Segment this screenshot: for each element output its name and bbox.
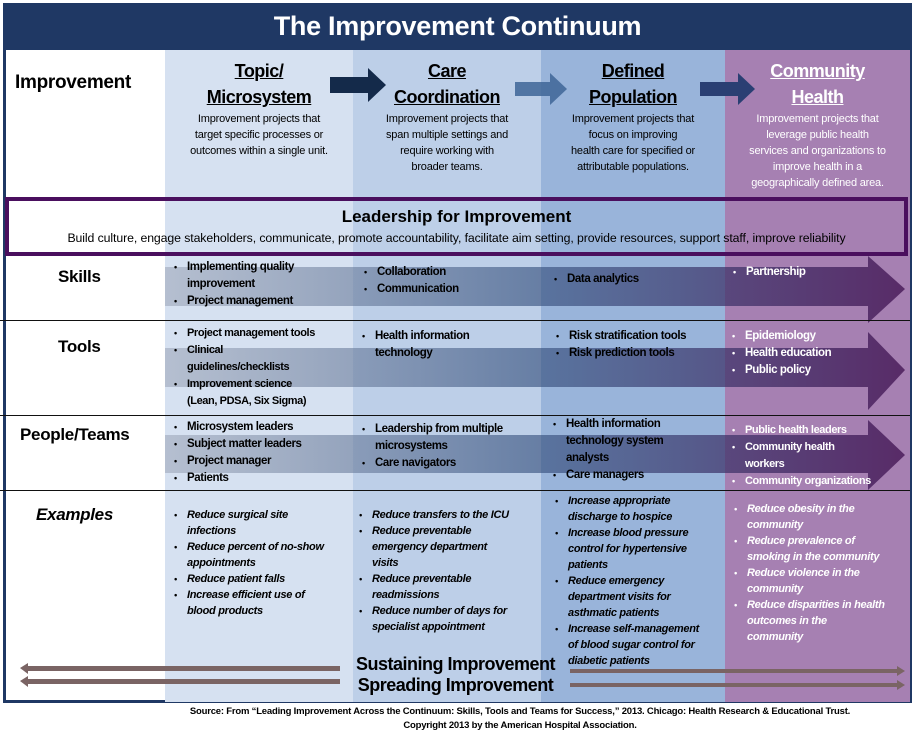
header: Community Health <box>770 61 866 107</box>
examples col3: control for hypertensive <box>568 543 687 555</box>
people col4: workers <box>745 458 784 470</box>
tools col2 <box>362 330 470 359</box>
examples col1: blood products <box>187 605 263 617</box>
people col4 <box>732 424 871 487</box>
people col3: technology system <box>566 435 663 447</box>
sustaining/spreading labels <box>356 654 556 695</box>
description: topic <box>190 113 328 157</box>
skills col2: Collaboration <box>377 266 446 278</box>
leadership text: Build culture, engage stakeholders, communicate, promote accountability, facilitate aim setting, provide resources, support staff, improve reliability <box>67 231 846 245</box>
people col1: Project manager <box>187 455 271 467</box>
people col3: Health information <box>566 418 660 430</box>
people col2: Leadership from multiple <box>375 423 503 435</box>
header: Defined Population: Population <box>589 87 677 107</box>
source footnote: Source: From “Leading Improvement Across the Continuum: Skills, Tools and Teams for Success,” 2013. Chicago: Health Research & Educational Trust. <box>190 706 850 717</box>
examples col2: visits <box>372 557 398 569</box>
examples col3: diabetic patients <box>568 655 650 667</box>
examples col2: Reduce number of days for <box>372 605 507 617</box>
description: defined population: attributable populations. <box>577 161 689 173</box>
tools col4 <box>732 330 831 376</box>
examples col2 <box>359 509 510 633</box>
column: topic/microsystem background <box>165 50 353 702</box>
people col4: Community organizations <box>745 475 871 487</box>
tools col1: Project management tools <box>187 327 315 339</box>
examples col3: asthmatic patients <box>568 607 659 619</box>
examples col4: Reduce prevalence of <box>747 535 855 547</box>
leadership box <box>5 197 908 256</box>
examples col3 <box>555 495 700 667</box>
examples col3: Increase blood pressure <box>568 527 688 539</box>
tools col3 <box>556 330 686 359</box>
people col2: Care navigators <box>375 457 456 469</box>
skills col1: Project management <box>187 295 293 307</box>
examples col3: discharge to hospice <box>568 511 672 523</box>
arrow 1 <box>330 68 386 102</box>
source footnote <box>190 706 850 731</box>
description: community health: geographically defined area. <box>751 177 884 189</box>
tools col1 <box>174 327 315 407</box>
people col1: Microsystem leaders <box>187 421 293 433</box>
description: topic: Improvement projects that <box>198 113 320 125</box>
description: community health: leverage public health <box>766 129 869 141</box>
label: Tools: Tools <box>58 337 101 356</box>
people col1: Subject matter leaders <box>187 438 302 450</box>
header: Topic/Microsystem <box>206 61 312 107</box>
examples col4: Reduce violence in the <box>747 567 860 579</box>
description: community health: Improvement projects that <box>756 113 879 125</box>
examples col3: Reduce emergency <box>568 575 664 587</box>
arrow 2 <box>515 73 567 105</box>
skills col2 <box>364 266 459 295</box>
examples col1: infections <box>187 525 236 537</box>
examples col2: Reduce transfers to the ICU <box>372 509 509 521</box>
source footnote: Copyright 2013 by the American Hospital Association. <box>403 720 637 731</box>
sustaining/spreading labels: Spreading Improvement <box>358 675 553 695</box>
examples col3: of blood sugar control for <box>568 639 695 651</box>
description: care coordination: span multiple settings and <box>386 129 508 141</box>
description: community health <box>749 113 886 189</box>
examples col3: department visits for <box>568 591 671 603</box>
examples col4: smoking in the community <box>747 551 879 563</box>
label: Skills: Skills <box>58 267 101 286</box>
description: defined population: health care for specified or <box>571 145 695 157</box>
examples col4 <box>734 503 885 643</box>
header: Community Health: Community <box>770 61 865 81</box>
people col3: analysts <box>566 452 609 464</box>
examples col2: emergency department <box>372 541 487 553</box>
column: care coordination background <box>353 50 541 702</box>
examples col1: Increase efficient use of <box>187 589 305 601</box>
examples col4: community <box>747 519 803 531</box>
header: Care Coordination: Coordination <box>394 87 500 107</box>
examples col3: Increase self-management <box>568 623 699 635</box>
header: Care Coordination <box>394 61 500 107</box>
tools col3: Risk stratification tools <box>569 330 686 342</box>
tools col3: Risk prediction tools <box>569 347 674 359</box>
examples col4: Reduce obesity in the <box>747 503 854 515</box>
description: defined population: Improvement projects that <box>572 113 694 125</box>
description: care coordination <box>386 113 508 173</box>
examples col3: patients <box>568 559 608 571</box>
examples col4: community <box>747 583 803 595</box>
description: defined population <box>571 113 695 173</box>
examples col2: specialist appointment <box>372 621 485 633</box>
skills col4: Partnership <box>746 266 806 278</box>
examples col4: outcomes in the <box>747 615 827 627</box>
examples col1: Reduce percent of no-show <box>187 541 324 553</box>
examples col1: appointments <box>187 557 256 569</box>
people col1: Patients <box>187 472 229 484</box>
header: Care Coordination: Care <box>428 61 466 81</box>
examples col2: Reduce preventable <box>372 573 471 585</box>
header: Defined Population <box>589 61 677 107</box>
examples col2: readmissions <box>372 589 439 601</box>
examples col3: Increase appropriate <box>568 495 670 507</box>
label: Improvement: Improvement <box>15 72 131 93</box>
leadership heading: Leadership for Improvement <box>342 207 571 226</box>
people col3: Care managers <box>566 469 644 481</box>
tools col2: technology <box>375 347 432 359</box>
header: Community Health: Health <box>791 87 844 107</box>
label: People/Teams: People/Teams <box>20 425 129 444</box>
column: community health background <box>725 50 910 702</box>
description: topic: outcomes within a single unit. <box>190 145 328 157</box>
description: defined population: focus on improving <box>589 129 677 141</box>
skills col2: Communication <box>377 283 459 295</box>
header: Topic/Microsystem: Microsystem <box>207 87 311 107</box>
examples col4: community <box>747 631 803 643</box>
tools col4: Health education <box>745 347 831 359</box>
sustaining/spreading labels: Sustaining Improvement <box>356 654 555 674</box>
skills col1: Implementing quality <box>187 261 294 273</box>
column: defined population background <box>541 50 725 702</box>
skills col1: improvement <box>187 278 255 290</box>
people col2: microsystems <box>375 440 448 452</box>
description: care coordination: broader teams. <box>411 161 483 173</box>
tools col4: Public policy <box>745 364 811 376</box>
examples col1: Reduce patient falls <box>187 573 285 585</box>
description: care coordination: Improvement projects that <box>386 113 508 125</box>
description: community health: improve health in a <box>773 161 862 173</box>
tools col4: Epidemiology <box>745 330 816 342</box>
description: topic: target specific processes or <box>195 129 323 141</box>
tools col1: (Lean, PDSA, Six Sigma) <box>187 395 306 407</box>
title bar <box>3 3 912 50</box>
skills col3: Data analytics <box>567 273 639 285</box>
arrow 3 <box>700 73 755 105</box>
header: Topic/Microsystem: Topic/ <box>235 61 283 81</box>
label: Examples: Examples <box>36 505 113 524</box>
tools col1: Clinical <box>187 344 223 356</box>
people col3 <box>553 418 663 481</box>
examples col1 <box>174 509 325 617</box>
header: Defined Population: Defined <box>602 61 664 81</box>
people col2 <box>362 423 503 469</box>
tools col1: Improvement science <box>187 378 292 390</box>
description: community health: services and organizations to <box>749 145 886 157</box>
examples col4: Reduce disparities in health <box>747 599 885 611</box>
skills col1 <box>174 261 294 307</box>
people col4: Public health leaders <box>745 424 847 436</box>
people col1 <box>174 421 302 484</box>
description: care coordination: require working with <box>400 145 494 157</box>
people col4: Community health <box>745 441 835 453</box>
tools col2: Health information <box>375 330 469 342</box>
title bar: The Improvement Continuum <box>274 11 641 41</box>
tools col1: guidelines/checklists <box>187 361 289 373</box>
examples col2: Reduce preventable <box>372 525 471 537</box>
examples col1: Reduce surgical site <box>187 509 288 521</box>
